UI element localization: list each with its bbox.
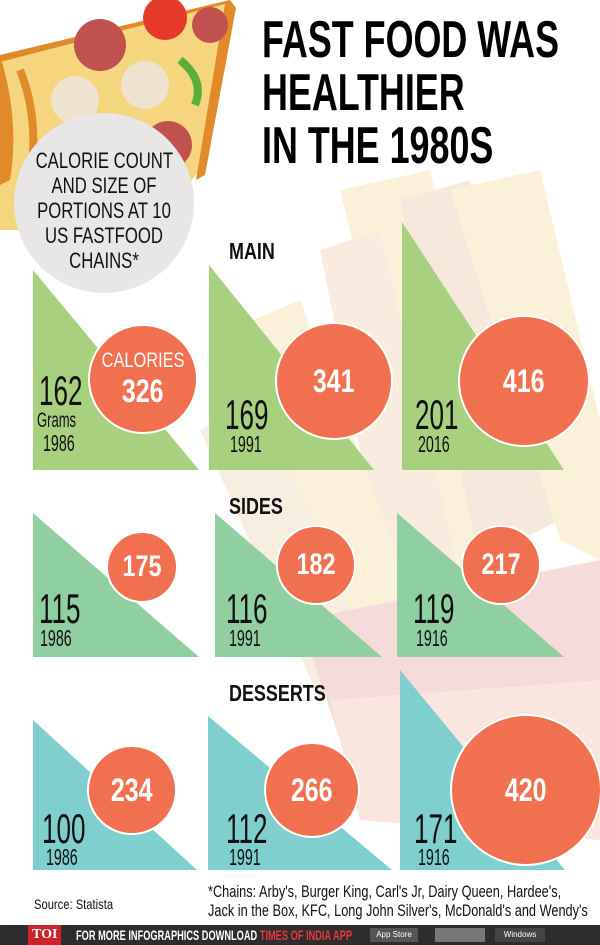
source: Source: Statista <box>34 896 113 912</box>
panel: sides: 115 <box>39 585 81 632</box>
panel: main: 1986 <box>43 430 75 456</box>
heading: sides: SIDES <box>229 493 283 519</box>
panel: desserts: 100 <box>42 805 85 852</box>
panel: sides: 217 <box>481 548 521 581</box>
footnote <box>208 882 588 920</box>
panel: sides: 175 <box>122 550 162 583</box>
panel: main: CALORIES <box>102 348 184 372</box>
footer bar: App Store <box>376 930 412 939</box>
footnote: *Chains: Arby's, Burger King, Carl's Jr, Dairy Queen, Hardee's, <box>208 882 561 901</box>
panel: main: 1991 <box>230 431 262 457</box>
panel: main: 416 <box>503 362 545 398</box>
panel: desserts: 1916 <box>418 844 450 870</box>
panel: desserts: 171 <box>414 805 457 852</box>
panel: main: 341 <box>313 362 355 398</box>
subtitle circle: PORTIONS AT 10 <box>37 198 171 223</box>
heading: desserts: DESSERTS <box>229 680 326 706</box>
panel: desserts: 420 <box>505 772 547 808</box>
panel: desserts: 1991 <box>229 844 261 870</box>
panel: sides: 116 <box>226 585 268 632</box>
footer bar: Windows <box>504 930 536 939</box>
panel: main: 169 <box>225 391 268 438</box>
pizza slice illustration <box>0 0 236 230</box>
panel: desserts: 112 <box>226 805 268 852</box>
panel: sides: 1986 <box>40 625 72 651</box>
panel: main: 326 <box>122 372 164 408</box>
panel: sides: 1916 <box>416 625 448 651</box>
panel: main <box>33 222 590 470</box>
title: HEALTHIER <box>262 64 465 122</box>
heading: main: MAIN <box>229 238 275 264</box>
subtitle circle <box>14 113 194 293</box>
title <box>262 11 559 175</box>
footer bar: TOI <box>32 927 57 942</box>
subtitle circle: US FASTFOOD <box>45 223 163 248</box>
panel: sides: 119 <box>413 585 455 632</box>
footer bar: FOR MORE INFOGRAPHICS DOWNLOAD TIMES OF INDIA APP <box>76 927 352 943</box>
panel: main: 162 <box>39 367 82 414</box>
panel: desserts <box>33 670 600 870</box>
panel: sides: 1991 <box>229 625 261 651</box>
subtitle circle: AND SIZE OF <box>52 173 156 198</box>
footer bar <box>0 925 600 945</box>
subtitle circle: CALORIE COUNT <box>36 148 173 173</box>
title: IN THE 1980S <box>262 117 493 175</box>
panel: main: Grams <box>37 409 76 432</box>
panel: sides: 182 <box>296 548 336 581</box>
panel: desserts: 1986 <box>46 844 78 870</box>
subtitle circle: CHAINS* <box>69 248 139 273</box>
panel: sides <box>33 513 564 657</box>
panel: main: 2016 <box>418 431 450 457</box>
footnote: Jack in the Box, KFC, Long John Silver's, McDonald's and Wendy's <box>208 901 588 920</box>
panel: main: 201 <box>415 391 458 438</box>
panel: desserts: 266 <box>291 772 333 808</box>
panel: desserts: 234 <box>111 772 153 808</box>
title: FAST FOOD WAS <box>262 11 559 69</box>
